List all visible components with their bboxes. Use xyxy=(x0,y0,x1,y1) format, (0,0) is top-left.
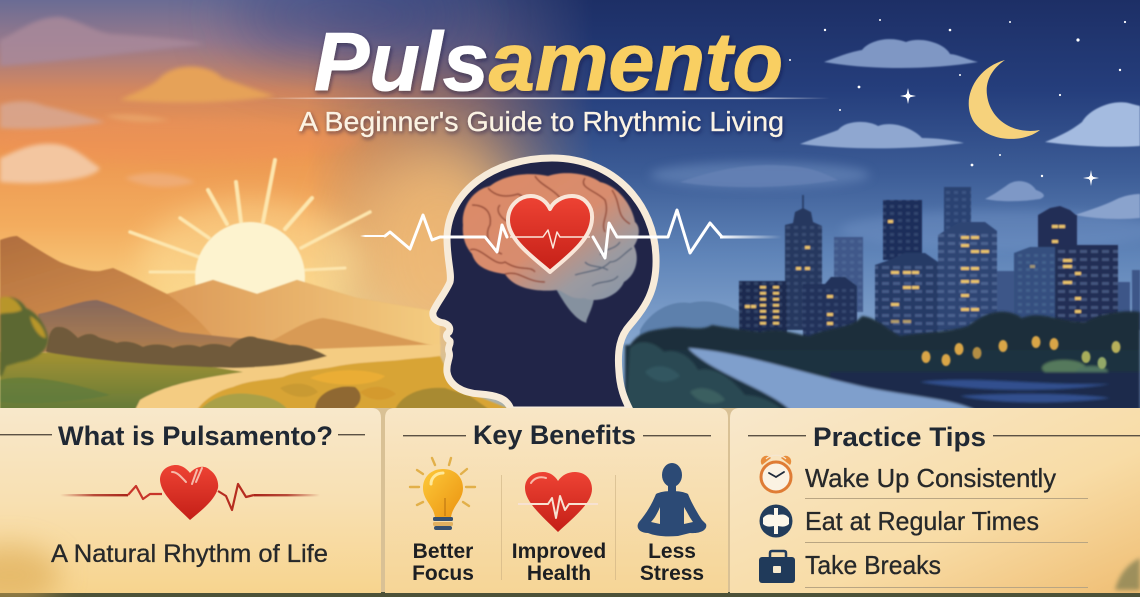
benefit: better focus xyxy=(410,458,475,585)
street lamps xyxy=(922,336,1120,369)
background sky xyxy=(0,0,1140,410)
label: improved health: Improved xyxy=(512,540,606,563)
icon: heart with pulse xyxy=(60,465,320,520)
label: better focus: Better xyxy=(413,540,473,563)
mid buildings xyxy=(739,200,1118,350)
benefit: less stress xyxy=(638,463,706,585)
panel backing band xyxy=(0,408,1140,593)
panel: What is Pulsamento xyxy=(0,408,381,597)
icon: heart with pulse xyxy=(518,472,598,532)
clouds: sunrise xyxy=(0,17,275,187)
label: less stress: Stress xyxy=(640,562,704,585)
tower with spire xyxy=(785,195,822,330)
label: less stress xyxy=(640,540,704,585)
panel: Practice Tips xyxy=(730,408,1140,593)
mountains xyxy=(0,236,440,370)
sun with rays xyxy=(130,160,370,332)
label: better focus: Focus xyxy=(412,562,474,585)
tip: take breaks xyxy=(759,550,1088,588)
icon: alarm clock xyxy=(761,455,791,492)
brain xyxy=(463,173,639,323)
heading: What is Pulsamento: What is Pulsamento? xyxy=(58,421,333,451)
bottom strip xyxy=(0,592,1140,597)
crescent moon xyxy=(969,60,1040,139)
label: take breaks: Take Breaks xyxy=(805,550,941,580)
distant hills xyxy=(640,301,745,345)
icon: briefcase xyxy=(759,551,795,583)
panel: Key Benefits xyxy=(385,408,728,593)
stars xyxy=(789,19,1126,186)
label: eat at regular times: Eat at Regular Times xyxy=(805,506,1039,536)
treeline and meadow xyxy=(0,327,512,410)
clouds: night xyxy=(680,39,1140,219)
heart in brain xyxy=(508,196,592,272)
tip: eat at regular times xyxy=(760,504,1088,543)
night city skyline xyxy=(640,187,1140,350)
heading: Key Benefits: Key Benefits xyxy=(473,420,636,450)
ECG line through head xyxy=(360,210,782,258)
heading: Practice Tips: Practice Tips xyxy=(813,422,986,452)
title: Pulsamento xyxy=(314,15,783,108)
title divider xyxy=(265,98,830,99)
benefit: improved health xyxy=(512,472,606,585)
label: less stress: Less xyxy=(648,540,696,563)
label: wake up consistently: Wake Up Consistently xyxy=(805,463,1056,493)
lit windows xyxy=(745,220,1081,325)
night trees, park and river xyxy=(625,311,1140,410)
tip: wake up consistently xyxy=(761,455,1088,499)
icon: meditating figure xyxy=(638,463,706,536)
left tree xyxy=(0,297,48,376)
back buildings xyxy=(834,187,1140,332)
label: improved health xyxy=(512,540,606,585)
label: better focus xyxy=(412,540,474,585)
subtitle: A Beginner's Guide to Rhythmic Living xyxy=(299,106,784,137)
head silhouette xyxy=(433,158,656,410)
text: A Natural Rhythm of Life: A Natural Rhythm of Life xyxy=(51,540,328,568)
icon: light bulb xyxy=(410,458,475,530)
icon: plate xyxy=(760,504,792,538)
label: improved health: Health xyxy=(527,562,591,585)
